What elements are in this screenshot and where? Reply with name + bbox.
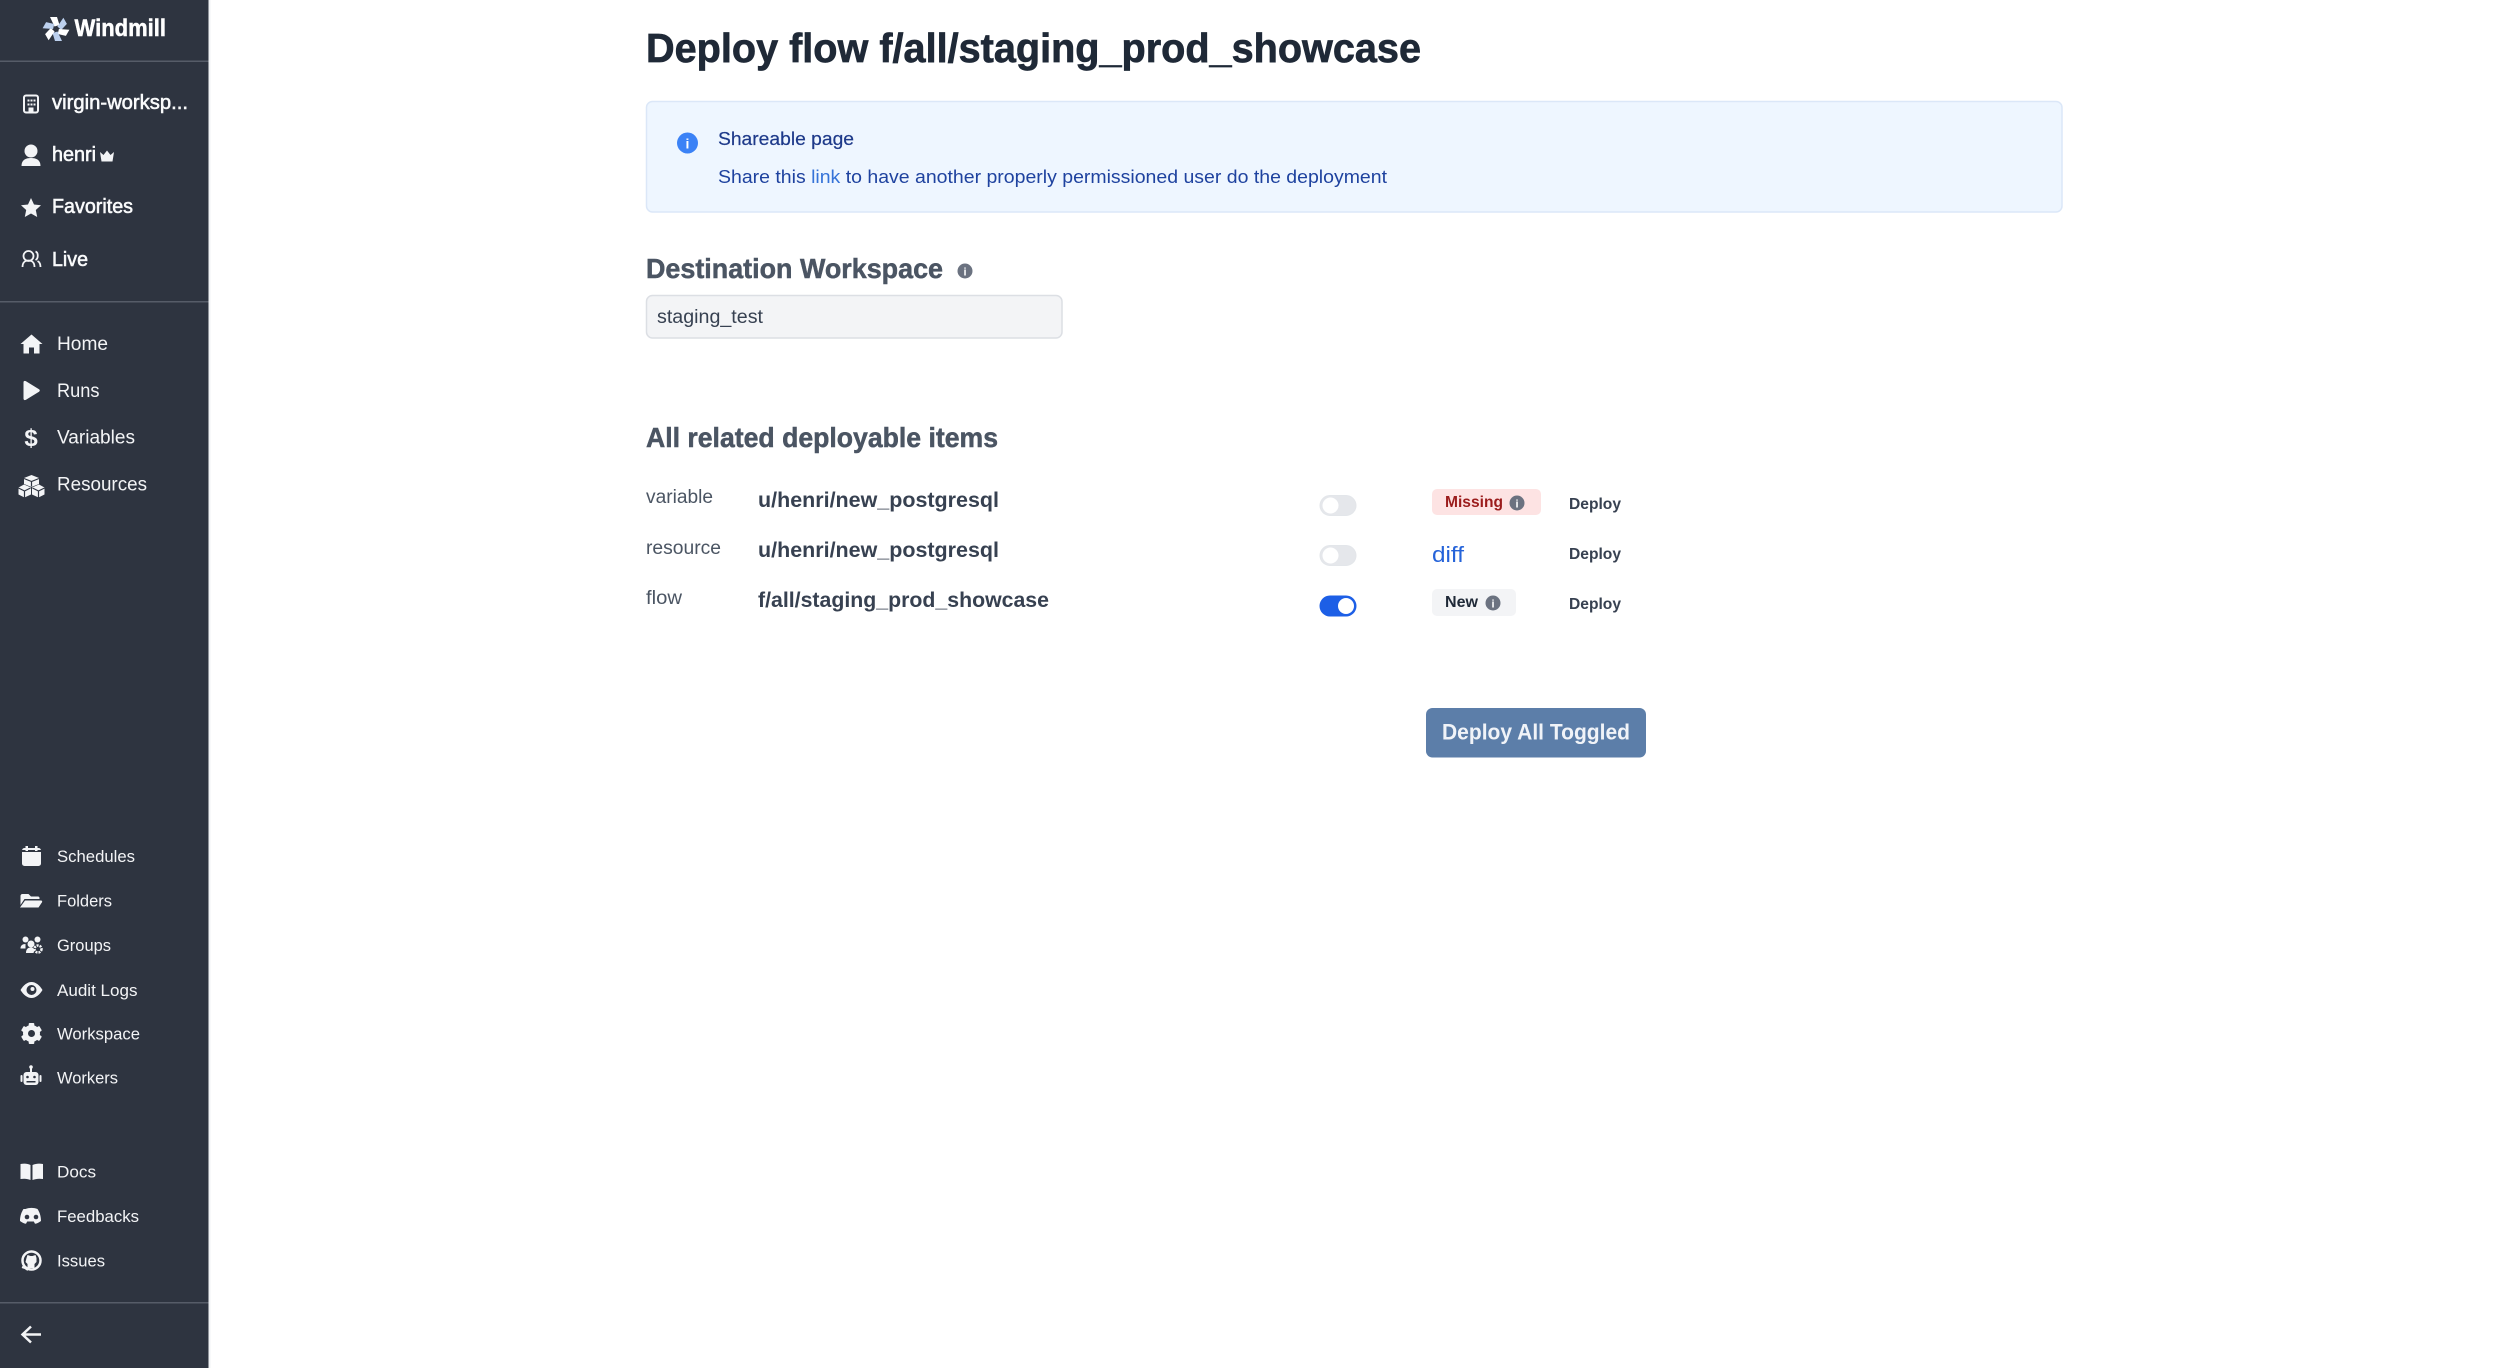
toggle: off [1320, 546, 1356, 566]
link: diff: diff [1432, 542, 1465, 567]
icon: info [677, 132, 698, 154]
panel: sidebar [0, 0, 210, 1368]
row: resource: resource [646, 538, 721, 559]
nav item: folders: Folders [57, 892, 112, 910]
button: deploy all toggled [1426, 708, 1646, 758]
nav item: schedules [22, 846, 135, 866]
icon: info [958, 264, 972, 278]
icon: info: i [963, 266, 967, 278]
nav item: home [20, 334, 108, 355]
nav item: schedules: Schedules [57, 848, 135, 866]
nav item: docs: Docs [57, 1164, 96, 1182]
nav item: workers: Workers [57, 1070, 118, 1088]
logo: Windmill: Windmill [74, 15, 166, 42]
nav item: feedbacks: Feedbacks [57, 1208, 139, 1226]
badge: missing: i [1515, 498, 1519, 510]
button: deploy all toggled: Deploy All Toggled [1442, 720, 1630, 744]
nav item: workers [20, 1065, 118, 1088]
callout heading: Shareable page [718, 128, 854, 149]
row: resource: u/henri/new_postgresql [758, 539, 999, 562]
row: flow: Deploy [1569, 596, 1621, 613]
nav item: favorites: Favorites [52, 196, 133, 218]
row: resource [646, 538, 1621, 567]
nav item: user: henri [52, 144, 96, 166]
badge: missing [1432, 489, 1541, 515]
nav item: variables: Variables [57, 428, 135, 448]
nav item: workspace settings [21, 1023, 140, 1044]
nav item: variables: $ [24, 425, 38, 452]
toggle: off [1320, 496, 1356, 516]
heading: all related deployable items: All related deployable items [646, 422, 998, 453]
row: variable: variable [646, 487, 713, 508]
title: Deploy flow f/all/staging_prod_showcase [646, 25, 1421, 71]
nav item: workspace settings: Workspace [57, 1026, 140, 1044]
badge: new [1432, 589, 1516, 616]
nav item: home: Home [57, 334, 108, 355]
nav item: audit logs [20, 982, 138, 1000]
heading: destination workspace: Destination Workspace [646, 253, 943, 284]
nav item: issues [22, 1252, 105, 1270]
nav item: feedbacks [20, 1208, 139, 1226]
row: variable: u/henri/new_postgresql [758, 489, 999, 512]
logo: Windmill [43, 15, 166, 42]
nav item: groups: Groups [57, 937, 111, 955]
nav item: live: Live [52, 249, 88, 271]
nav item: live [22, 249, 88, 271]
nav item: resources: Resources [57, 474, 147, 496]
row: flow: f/all/staging_prod_showcase [758, 589, 1049, 612]
icon: info: i [686, 136, 689, 152]
icon: collapse arrow [22, 1326, 41, 1342]
input: destination workspace [646, 296, 1062, 338]
nav item: variables [24, 425, 135, 452]
badge: missing: Missing [1445, 494, 1503, 511]
row: flow: flow [646, 588, 682, 609]
row: flow [646, 588, 1621, 616]
nav item: workspace: virgin-worksp... [52, 92, 188, 114]
badge: new: New [1445, 594, 1479, 611]
input: destination workspace: staging_test [657, 307, 764, 328]
callout: shareable page [646, 102, 2062, 212]
row: resource: Deploy [1569, 546, 1621, 563]
badge: new: i [1491, 598, 1495, 610]
nav item: runs: Runs [57, 381, 100, 402]
nav item: runs [24, 381, 100, 402]
nav item: user [22, 144, 114, 166]
row: variable [646, 487, 1621, 516]
nav item: folders [20, 892, 112, 910]
callout text: Share this link to have another properly permissioned user do the deployment [718, 166, 1387, 187]
nav item: resources [18, 474, 147, 498]
toggle: on [1320, 596, 1356, 616]
nav item: audit logs: Audit Logs [57, 982, 138, 1000]
nav item: docs [20, 1164, 96, 1182]
nav item: issues: Issues [57, 1252, 105, 1270]
row: variable: Deploy [1569, 496, 1621, 513]
nav item: groups [20, 936, 111, 955]
